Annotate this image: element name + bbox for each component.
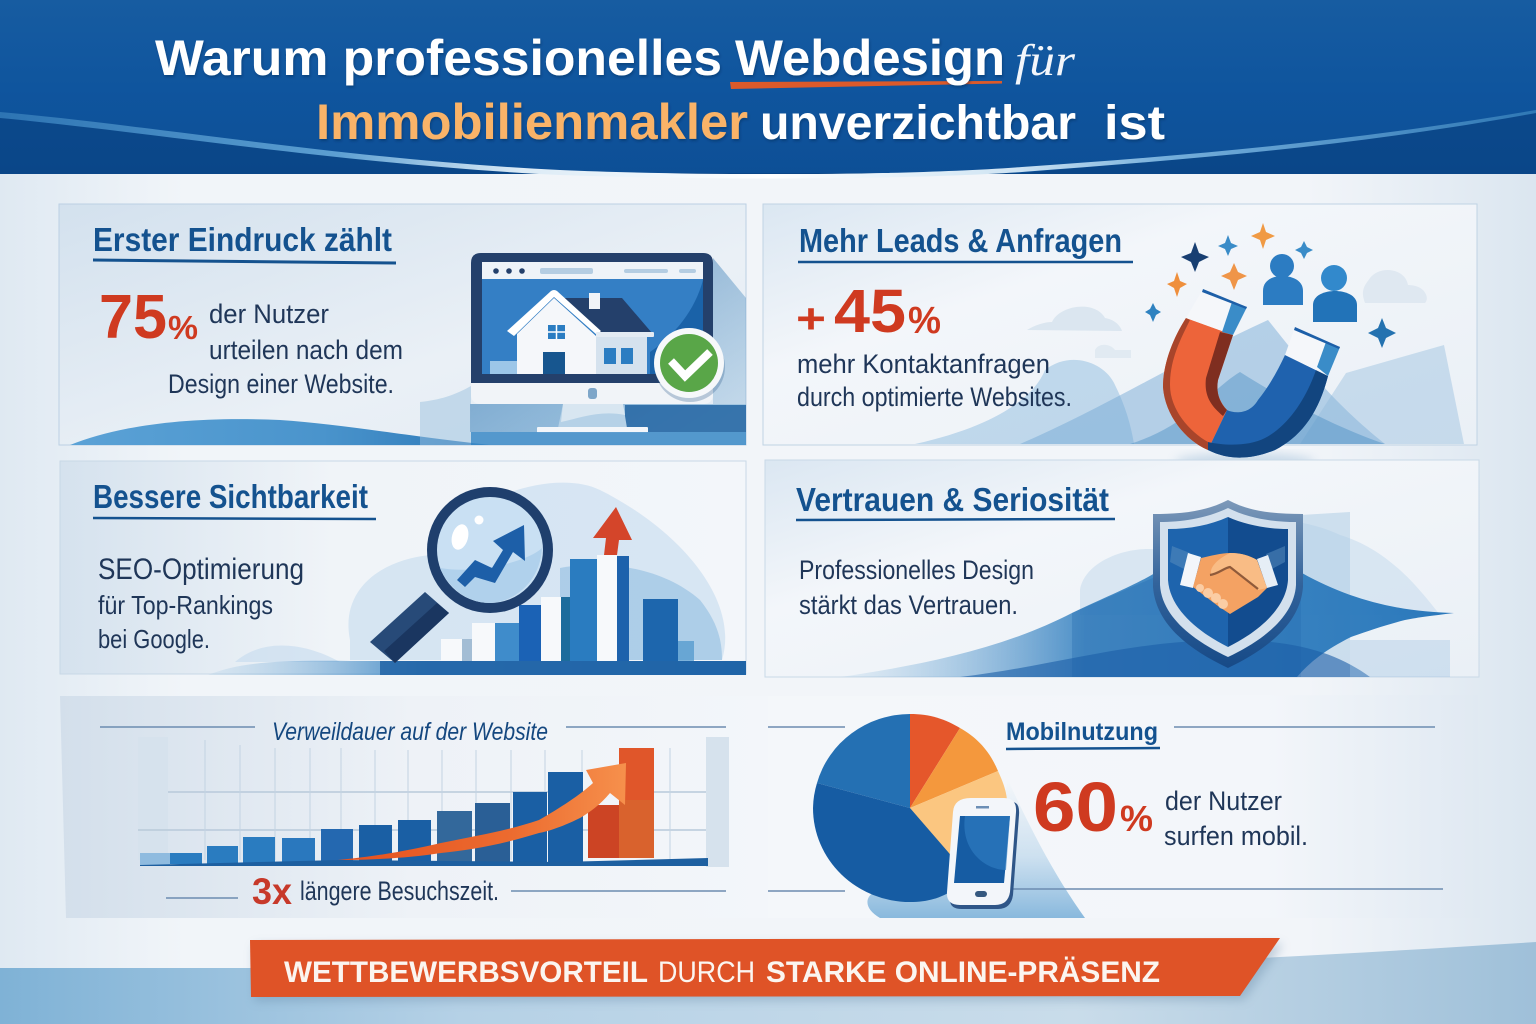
icon: shield with handshake [1153,500,1303,668]
footer wave [0,942,1536,1024]
banner: Wettbewerbsvorteil [250,938,1283,1001]
text block: für Top-Rankings [98,590,273,620]
heading: Mehr Leads & Anfragen [799,222,1122,259]
panel: Vertrauen & Seriosität [765,460,1479,677]
heading: Mobilnutzung [1006,718,1158,746]
title: Immobilienmakler [316,94,748,150]
text block: Professionelles Design [799,555,1034,585]
heading: Erster Eindruck zählt [93,221,392,258]
callout: längere Besuchszeit. [300,876,499,906]
icon: red up arrow [593,507,632,555]
text block: stärkt das Vertrauen. [799,590,1018,620]
icon: magnet [1163,289,1340,458]
bar chart [441,555,694,661]
title: Webdesign [735,30,1005,86]
text block: SEO-Optimierung [98,553,304,586]
banner: Wettbewerbsvorteil: STARKE ONLINE-PRÄSENZ [766,956,1160,989]
panel: Erster Eindruck zählt [59,204,746,445]
stat: +45%: % [908,300,941,342]
title [155,30,1165,150]
icon: magnifier [370,487,553,663]
panel: Mehr Leads & Anfragen [763,204,1477,471]
header band [0,0,1536,178]
panel: Bessere Sichtbarkeit [60,461,746,675]
panel: Mobilnutzung [768,695,1480,918]
stat: +45%: 45 [834,277,906,345]
stat: +45% [796,277,941,345]
stat: 75%: % [168,309,198,346]
text block [799,555,1034,620]
title: Warum professionelles [155,30,722,86]
text block [1164,786,1308,851]
icon: monitor with house [470,253,746,445]
title: ist [1104,97,1165,150]
panel: Verweildauer auf der Website [60,696,768,918]
stat: 75% [99,283,198,352]
stat: 60%: 60 [1033,768,1118,846]
text block [98,553,304,654]
title: für [1015,36,1076,85]
bars [140,748,708,866]
title: unverzichtbar [760,97,1076,150]
text block: durch optimierte Websites. [797,382,1072,412]
text block [168,299,403,399]
text block: der Nutzer [1165,786,1282,816]
callout [252,871,499,912]
text block: Design einer Website. [168,369,394,399]
text block: bei Google. [98,624,210,654]
callout: 3x [252,871,292,912]
icon: sparkles [1145,223,1396,348]
banner: Wettbewerbsvorteil: WETTBEWERBSVORTEIL [284,956,648,989]
pie chart [813,714,1007,902]
text block: der Nutzer [209,299,329,329]
stat: 60% [1033,768,1153,846]
arrow [338,763,626,860]
icon: people [1263,254,1357,322]
text block [797,349,1072,412]
stat: 75%: 75 [99,283,167,352]
text block: surfen mobil. [1164,821,1308,851]
icon: smartphone [947,798,1019,909]
chart grid [138,737,729,867]
stat: 60%: % [1120,798,1153,839]
text block: urteilen nach dem [209,335,403,365]
heading: Vertrauen & Seriosität [796,481,1109,518]
heading: Verweildauer auf der Website [272,718,548,746]
text block: mehr Kontaktanfragen [797,349,1050,379]
stat: +45%: + [796,295,826,342]
heading: Bessere Sichtbarkeit [93,478,368,515]
banner: Wettbewerbsvorteil: DURCH [658,956,755,989]
header swoosh [0,110,1536,178]
